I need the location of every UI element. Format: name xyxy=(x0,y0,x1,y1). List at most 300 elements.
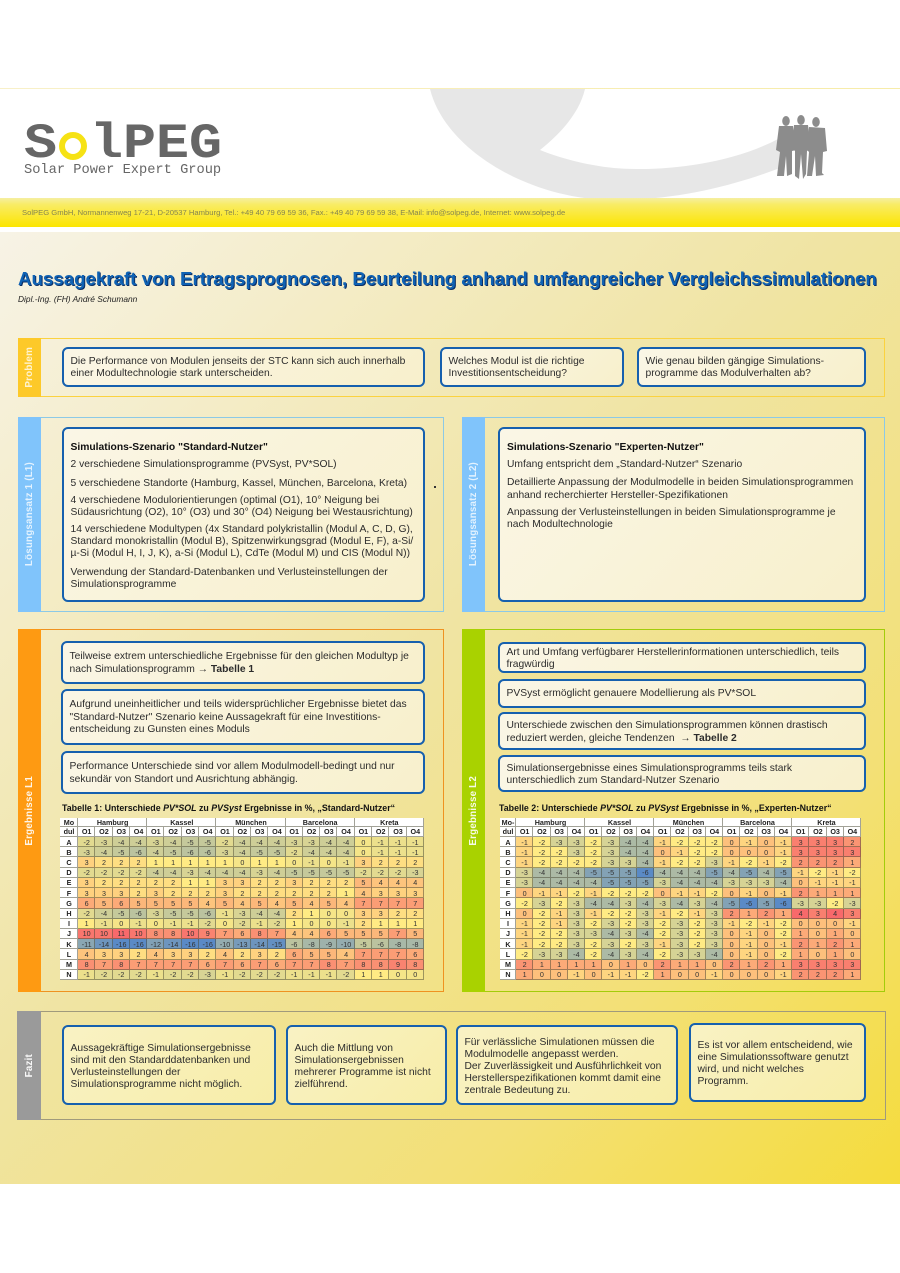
table 2: heat map: 2 xyxy=(730,960,734,969)
table 2: heat map: -3 xyxy=(728,878,735,887)
table 2: heat map: -3 xyxy=(659,878,666,887)
table 1: heat map: -3 xyxy=(412,868,418,877)
table 2: heat map: 0 xyxy=(747,970,751,979)
table 2: heat map: H xyxy=(505,909,511,918)
table 1: heat map: -3 xyxy=(205,970,211,979)
table 2: heat map: -4 xyxy=(677,878,683,887)
logo wordmark: SolPEG xyxy=(24,116,222,172)
table 2: heat map: -2 xyxy=(521,950,528,959)
table 1: heat map: L xyxy=(67,950,71,959)
table 1: heat map: 9 xyxy=(206,929,210,938)
conclusion 4: Es ist vor allem entscheidend, wie xyxy=(698,1040,853,1051)
table 1: heat map: 1 xyxy=(396,919,400,928)
table 2: heat map: -3 xyxy=(677,919,683,928)
finding 1: Teilweise extrem unterschiedliche Ergebnisse für den gleichen Modultyp je xyxy=(70,651,409,662)
table 1: heat map: 5 xyxy=(379,929,383,938)
table 1: heat map: O1 xyxy=(359,827,368,836)
table 2: heat map: -2 xyxy=(521,899,528,908)
table 2: heat map: -2 xyxy=(556,858,562,867)
table 1: heat map: 2 xyxy=(206,889,210,898)
table 2: heat map: -2 xyxy=(608,889,614,898)
table 2: heat map: -2 xyxy=(780,919,787,928)
label: Fazit xyxy=(17,1011,41,1120)
table 1: heat map: -4 xyxy=(256,838,263,846)
table 1: heat map: -4 xyxy=(170,838,176,846)
table 1: heat map: -1 xyxy=(395,848,401,857)
problem statement 2: Welches Modul ist die richtige xyxy=(448,356,585,366)
table 2: heat map: O2 xyxy=(813,827,823,836)
table 2: heat map: -2 xyxy=(608,909,614,918)
table 1: heat map: -4 xyxy=(343,848,349,857)
table 1: heat map: 1 xyxy=(85,919,89,928)
table 2: heat map: -3 xyxy=(711,919,718,928)
panel: Ergebnisse L1 xyxy=(18,629,444,992)
table 1: heat map: 2 xyxy=(137,858,141,867)
table 1: heat map: O1 xyxy=(151,827,161,836)
table 2: heat map: 1 xyxy=(781,960,785,969)
table 2: heat map: -2 xyxy=(590,848,597,857)
table 1: heat map: 3 xyxy=(85,878,89,887)
table 1: heat map: 2 xyxy=(275,889,279,898)
table 1: heat map: 7 xyxy=(396,899,400,908)
table 1: heat map: -2 xyxy=(83,838,90,846)
table 2: heat map: -1 xyxy=(539,889,545,898)
table 2: heat map: -2 xyxy=(832,899,838,908)
table 2: heat map: 0 xyxy=(643,960,647,969)
finding 1 xyxy=(61,641,425,684)
table 2: heat map: 3 xyxy=(816,838,820,846)
table 2: heat map: 1 xyxy=(747,960,751,969)
table 1: heat map: 4 xyxy=(292,929,296,938)
table 1: heat map: O4 xyxy=(134,827,143,836)
table 2: heat map: 0 xyxy=(764,970,768,979)
table 2: heat map: -1 xyxy=(608,970,614,979)
table 1: heat map: -4 xyxy=(274,868,280,877)
table 1: heat map: -10 xyxy=(341,940,351,949)
table 1: heat map: 1 xyxy=(188,858,192,867)
table 1: heat map: 3 xyxy=(85,889,89,898)
table 2: heat map: -3 xyxy=(711,858,718,867)
table 2: heat map: 0 xyxy=(850,929,854,938)
table 1: heat map: O4 xyxy=(341,827,351,836)
table 1: heat map: 0 xyxy=(119,919,123,928)
table 1: heat map: O1 xyxy=(220,827,230,836)
conclusion 3: Modulmodelle angepasst werden. xyxy=(464,1048,618,1060)
problem statement 1: einer Modultechnologie stark unterscheiden. xyxy=(70,368,273,379)
table 1: heat map: 7 xyxy=(292,960,296,969)
table 1: heat map: -1 xyxy=(343,919,349,928)
table 2: heat map: -3 xyxy=(539,899,545,908)
table 2: heat map: -6 xyxy=(642,868,649,877)
table 2: heat map: -4 xyxy=(642,950,649,959)
table 2: heat map: dul xyxy=(503,827,513,836)
table 2: heat map: -1 xyxy=(556,889,562,898)
label: Problem xyxy=(18,338,41,397)
table 1: heat map: -4 xyxy=(239,848,246,857)
table 1: heat map: -10 xyxy=(220,940,230,949)
table 2: heat map: 0 xyxy=(730,848,734,857)
table 2: heat map: 1 xyxy=(816,940,820,949)
table 2: heat map: I xyxy=(507,919,509,928)
table 2: heat map: -1 xyxy=(746,940,752,949)
table 2: heat map: 1 xyxy=(678,960,682,969)
finding 1: fragwürdig xyxy=(506,659,555,670)
table 1: heat map: 1 xyxy=(171,858,175,867)
table 1: heat map: -5 xyxy=(187,838,194,846)
table 2: heat map: 2 xyxy=(764,960,768,969)
table 2: heat map: -2 xyxy=(815,868,821,877)
conclusion 4: eine Simulationssoftware genutzt xyxy=(698,1052,849,1063)
table 2: heat map: -1 xyxy=(832,868,838,877)
table 1: heat map: -1 xyxy=(326,970,332,979)
table 1: heat map: 10 xyxy=(83,929,91,938)
table 1: heat map: -1 xyxy=(222,909,228,918)
table 1: heat map: -2 xyxy=(135,868,142,877)
table 1: heat map: 5 xyxy=(327,899,331,908)
finding 3 xyxy=(61,751,425,794)
gradient poster background xyxy=(0,232,900,1184)
table 2: heat map: -2 xyxy=(625,940,631,949)
table 1: heat map: -4 xyxy=(222,868,228,877)
table 1: heat map: -5 xyxy=(256,848,263,857)
table 1: heat map: 7 xyxy=(396,950,400,959)
table 2: heat map: -4 xyxy=(711,899,718,908)
conclusion 2: mehrerer Programme ist nicht xyxy=(294,1066,431,1078)
table 2: heat map: 0 xyxy=(609,960,613,969)
table 2: heat map xyxy=(500,818,861,980)
table 1: heat map: -3 xyxy=(291,838,297,846)
table 2: heat map: 2 xyxy=(799,940,803,949)
table 1: heat map: 1 xyxy=(361,970,365,979)
table 1: heat map: -2 xyxy=(360,868,367,877)
table 1: heat map: 1 xyxy=(413,919,417,928)
table 2: heat map: -4 xyxy=(780,878,787,887)
table 2: heat map: -5 xyxy=(625,878,631,887)
table 2: heat map: -3 xyxy=(642,909,649,918)
table 2: heat map: 1 xyxy=(799,950,803,959)
table 2: heat map: -2 xyxy=(625,889,631,898)
table 1: heat map: -4 xyxy=(274,838,280,846)
table 1: heat map: -1 xyxy=(187,919,194,928)
table 1: heat map: C xyxy=(66,858,72,867)
table 1: heat map: -4 xyxy=(308,848,315,857)
table 1: heat map: -1 xyxy=(256,919,263,928)
label: Lösungsansatz 1 xyxy=(18,417,41,612)
table 1: heat map: 6 xyxy=(119,899,123,908)
table 1: heat map: 0 xyxy=(327,909,331,918)
table 2: heat map: -3 xyxy=(694,899,700,908)
table 1: heat map: 5 xyxy=(188,899,192,908)
table 2: heat map: L xyxy=(506,950,510,959)
table 2: heat map: -2 xyxy=(556,929,562,938)
table 1: heat map: -1 xyxy=(377,848,384,857)
table 1: heat map: 7 xyxy=(379,950,383,959)
table 2: heat map: -3 xyxy=(625,950,631,959)
table 2: heat map: Barcelona xyxy=(740,818,775,827)
finding 2: "Standard-Nutzer" Szenario keine Aussagekraft für eine Investitions- xyxy=(70,712,381,723)
table 2: heat map: O3 xyxy=(761,827,771,836)
table 1: heat map: -3 xyxy=(101,838,107,846)
table 1: heat map: -2 xyxy=(239,970,246,979)
table 1: heat map: -8 xyxy=(395,940,401,949)
table 2: heat map: -2 xyxy=(780,950,787,959)
table 1: heat map: 5 xyxy=(361,878,365,887)
table 1: heat map: -4 xyxy=(170,868,176,877)
table 1: heat map: O1 xyxy=(289,827,299,836)
table 2: heat map: O4 xyxy=(779,827,788,836)
table 1: heat map: 2 xyxy=(137,950,141,959)
table 2: heat map: -1 xyxy=(573,970,580,979)
table 2: heat map: 1 xyxy=(626,960,630,969)
table 1: heat map: 10 xyxy=(100,929,108,938)
table 1: heat map: 2 xyxy=(119,858,123,867)
table 2: heat map: -3 xyxy=(573,909,580,918)
table 1: heat map: 1 xyxy=(379,919,383,928)
table 1: heat map: 2 xyxy=(258,889,262,898)
table 2: heat map: 0 xyxy=(592,970,596,979)
table 2: heat map: -2 xyxy=(694,848,700,857)
table 2: heat map: 3 xyxy=(799,848,803,857)
label: Ergebnisse L1 xyxy=(18,629,41,992)
table 2: heat map: -2 xyxy=(539,940,545,949)
finding 2: entscheidung zu Gunsten eines Moduls xyxy=(70,724,250,735)
table 2: heat map: -3 xyxy=(625,929,631,938)
label: Ergebnisse L2: Ergebnisse L2 xyxy=(468,776,479,845)
icon: three business people silhouette xyxy=(776,115,827,179)
table 1: heat map: M xyxy=(66,960,72,969)
table 2: heat map: -2 xyxy=(746,858,752,867)
table 2: heat map: O3 xyxy=(554,827,564,836)
table 1: heat map: 3 xyxy=(379,909,383,918)
table 2: heat map: -2 xyxy=(780,858,787,867)
table 1: heat map: O3 xyxy=(393,827,403,836)
scenario box: Experten-Nutzer: Umfang entspricht dem „Standard-Nutzer“ Szenario xyxy=(507,459,742,470)
table 1: heat map: 1 xyxy=(379,970,383,979)
table 2: heat map: 1 xyxy=(850,889,854,898)
table 1: heat map: 5 xyxy=(344,929,348,938)
conclusion 4: wird, und nicht welches xyxy=(698,1064,804,1075)
conclusion 3: Der Zuverlässigkeit und Ausführlichkeit von xyxy=(464,1060,661,1072)
table 2: heat map: -2 xyxy=(711,889,718,898)
table 1: heat map: 5 xyxy=(310,950,314,959)
table 2: heat map: -1 xyxy=(728,858,735,867)
table 1: heat map: -6 xyxy=(135,909,142,918)
table 2: heat map: -2 xyxy=(590,940,597,949)
table 1: heat map: 4 xyxy=(310,899,314,908)
table 2: heat map: -4 xyxy=(625,838,631,846)
finding 3: sekundär von Standort und Ausrichtung abhängig. xyxy=(70,774,298,784)
table 2: heat map: -4 xyxy=(608,899,614,908)
table 1: heat map: 5 xyxy=(258,899,262,908)
table 2: heat map: Mo- xyxy=(502,818,514,827)
table 1: heat map: -1 xyxy=(343,858,349,867)
table 1: heat map: -2 xyxy=(222,838,228,846)
table 2: heat map: -4 xyxy=(642,899,649,908)
table 1: heat map: 2 xyxy=(102,878,106,887)
table 1: heat map: O2 xyxy=(238,827,247,836)
table 2: heat map: -2 xyxy=(556,940,562,949)
table 1: heat map: -5 xyxy=(205,838,211,846)
table 1: heat map: O2 xyxy=(99,827,109,836)
table 2: heat map: 1 xyxy=(557,960,561,969)
table 2: heat map: -1 xyxy=(728,919,735,928)
table 2: heat map: 2 xyxy=(816,858,820,867)
scenario box: Standard-Nutzer xyxy=(62,427,425,602)
table 2: heat map: -4 xyxy=(728,868,735,877)
table 1: heat map: O2 xyxy=(168,827,178,836)
table 1: heat map: 3 xyxy=(379,889,383,898)
table 2: heat map: -5 xyxy=(763,899,769,908)
table 1: heat map: 3 xyxy=(223,878,227,887)
table 1: heat map: 3 xyxy=(240,878,244,887)
table 1: heat map: 7 xyxy=(396,929,400,938)
conclusion 3: Herstellerspezifikationen kommt damit eine xyxy=(464,1072,661,1084)
table 2: heat map: 1 xyxy=(850,970,854,979)
table 1: heat map: -2 xyxy=(101,970,107,979)
table 1: heat map: -14 xyxy=(99,940,109,949)
table 2: heat map: 2 xyxy=(799,970,803,979)
table 1: heat map: 7 xyxy=(310,960,314,969)
table 1: heat map: 5 xyxy=(102,899,106,908)
table 1: heat map: 8 xyxy=(154,929,158,938)
table 2: heat map: -3 xyxy=(677,929,683,938)
table 2: heat map: -3 xyxy=(677,950,683,959)
table 1: heat map: -3 xyxy=(256,868,263,877)
table 2: heat map: -5 xyxy=(608,878,614,887)
scenario box: Experten-Nutzer: Simulations-Szenario "Experten-Nutzer" xyxy=(507,442,704,453)
table 1: heat map: Kreta xyxy=(380,818,399,827)
table 2: heat map: -1 xyxy=(780,940,787,949)
table 2: heat map: -4 xyxy=(573,868,580,877)
finding 3: Performance Unterschiede sind vor allem Modulmodell-bedingt und nur xyxy=(70,761,395,772)
table 2: heat map: 1 xyxy=(747,909,751,918)
table 2: heat map: 2 xyxy=(833,858,837,867)
table 1: heat map: 8 xyxy=(85,960,89,969)
table 1: heat map: dul xyxy=(64,827,74,836)
table 1: heat map: 2 xyxy=(379,858,383,867)
table 2: heat map: -1 xyxy=(677,848,683,857)
table 1: heat map: -4 xyxy=(101,848,107,857)
table 1: heat map: 4 xyxy=(240,899,244,908)
table 2: heat map: 0 xyxy=(764,838,768,846)
table 2: heat map: -4 xyxy=(694,868,700,877)
header swirl graphic xyxy=(430,89,780,198)
table 1: heat map: 2 xyxy=(310,878,314,887)
table 1: heat map: 7 xyxy=(413,899,417,908)
conclusion 1 xyxy=(62,1025,276,1105)
table 1: heat map: 7 xyxy=(223,960,227,969)
table 2: heat map: O3 xyxy=(692,827,702,836)
table 2: heat map: N xyxy=(505,970,511,979)
conclusion 1: Simulationsprogramme nicht möglich. xyxy=(70,1078,242,1090)
table 1: heat map: -16 xyxy=(116,940,126,949)
table 2: heat map: -4 xyxy=(573,950,580,959)
table 2: heat map: -5 xyxy=(711,868,718,877)
table 2: heat map: -4 xyxy=(573,878,580,887)
table 2: heat map: -4 xyxy=(608,950,614,959)
table 2: heat map: 0 xyxy=(557,970,561,979)
table 2: heat map: 0 xyxy=(730,970,734,979)
table 1: heat map: 3 xyxy=(171,950,175,959)
table 2: heat map: -5 xyxy=(608,868,614,877)
table 1: heat map: 7 xyxy=(154,960,158,969)
table 1: heat map: -2 xyxy=(101,868,107,877)
table 2: heat map: -2 xyxy=(642,889,649,898)
finding 2 xyxy=(61,689,425,745)
table 2: heat map: -1 xyxy=(797,868,804,877)
table 1: heat map: 3 xyxy=(361,858,365,867)
table 1: heat map: 4 xyxy=(344,950,348,959)
table 2: heat map: K xyxy=(505,940,511,949)
table 2: heat map: -1 xyxy=(849,919,856,928)
scenario box: Standard-Nutzer: Standard monokristallin (Modul B), Spitzenwirkungsgrad (Modul E, F), a-Si/ xyxy=(70,536,413,547)
table 2: heat map: 1 xyxy=(833,950,837,959)
table 2: heat map: -4 xyxy=(677,899,683,908)
table 1: heat map: E xyxy=(67,878,71,887)
table 2: heat map: 0 xyxy=(695,970,699,979)
table 2: heat map: -2 xyxy=(711,848,718,857)
table 1: heat map: 4 xyxy=(361,889,365,898)
table 2: heat map: -4 xyxy=(711,950,718,959)
table 2: heat map: O2 xyxy=(744,827,754,836)
conclusion 4 xyxy=(689,1023,866,1102)
table 1: heat map: -4 xyxy=(153,848,159,857)
label: Lösungsansatz 2 xyxy=(462,417,485,612)
table 1: heat map: -4 xyxy=(326,848,332,857)
table 1: heat map: 2 xyxy=(137,889,141,898)
scenario box: Experten-Nutzer: nach Modultechnologie xyxy=(507,519,613,530)
table 1: heat map: -1 xyxy=(222,970,228,979)
table 2: heat map: 1 xyxy=(574,960,578,969)
table 2: heat map: -4 xyxy=(694,878,700,887)
table 1: heat map: D xyxy=(66,868,72,877)
table 2: heat map: 2 xyxy=(833,970,837,979)
table 1: heat map: -14 xyxy=(254,940,265,949)
conclusion 2: zielführend. xyxy=(294,1078,348,1090)
table 2: heat map: -1 xyxy=(659,940,666,949)
table 2: heat map: 0 xyxy=(523,889,527,898)
table 1: heat map: -14 xyxy=(168,940,178,949)
table 1: heat map: -12 xyxy=(151,940,161,949)
finding 4 xyxy=(498,755,866,792)
table 2: heat map: -3 xyxy=(521,878,528,887)
table 2: heat map: -3 xyxy=(573,940,580,949)
table 1: heat map: 3 xyxy=(223,889,227,898)
table 2: heat map: -2 xyxy=(642,970,649,979)
table 1: heat map: -6 xyxy=(377,940,384,949)
table 1 caption: Tabelle 1: Unterschiede PV*SOL zu PVSyst Ergebnisse in %, „Standard-Nutzer“ xyxy=(62,802,395,812)
table 2: heat map: -1 xyxy=(763,858,769,867)
table 2: heat map: O3 xyxy=(623,827,633,836)
table 1: heat map: 2 xyxy=(154,878,158,887)
table 1: heat map: 7 xyxy=(188,960,192,969)
table 2: heat map: -2 xyxy=(694,929,700,938)
table 1: heat map: 3 xyxy=(85,858,89,867)
table 1: heat map: 6 xyxy=(240,960,244,969)
table 2: heat map: -4 xyxy=(763,868,769,877)
table 2: heat map: -1 xyxy=(815,878,821,887)
table 1: heat map: Mo xyxy=(64,818,74,827)
table 2: heat map: O4 xyxy=(641,827,650,836)
table 2: heat map: -1 xyxy=(780,848,787,857)
table 1: heat map: 2 xyxy=(413,909,417,918)
table 2: heat map: -1 xyxy=(556,919,562,928)
table 2: heat map: -4 xyxy=(608,929,614,938)
table 2: heat map: 0 xyxy=(661,889,665,898)
table 1: heat map: 5 xyxy=(292,899,296,908)
table 1: heat map: -9 xyxy=(326,940,332,949)
problem statement 2 xyxy=(440,347,624,387)
